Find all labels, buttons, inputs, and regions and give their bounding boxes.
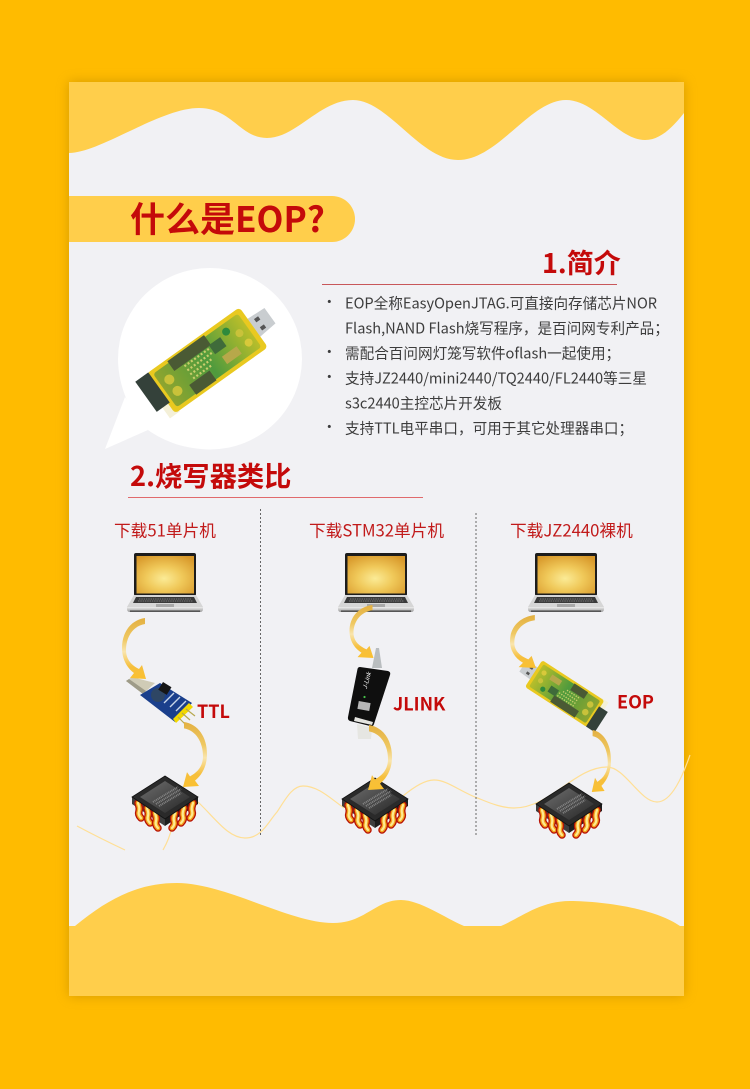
- heading: 2 comparison: 2.烧写器类比: [130, 454, 291, 494]
- icon: chip 1: [132, 776, 198, 828]
- text block: intro bullets: 支持TTL电平串口，可用于其它处理器串口；: [345, 418, 633, 438]
- label: JZ2440: 下载JZ2440裸机: [510, 518, 633, 542]
- label: 51: 下载51单片机: [114, 518, 216, 542]
- title: 什么是EOP?: [130, 192, 325, 243]
- icon: JLINK probe: [348, 648, 390, 739]
- text block: intro bullets: •: [322, 291, 337, 312]
- panel: main sheet: [69, 82, 684, 996]
- text block: intro bullets: [322, 291, 669, 438]
- text block: intro bullets: EOP全称EasyOpenJTAG.可直接向存储芯片NOR: [345, 292, 657, 314]
- icon: laptop 3: [528, 553, 604, 612]
- tag: TTL: TTL: [197, 698, 230, 724]
- text block: intro bullets: •: [322, 341, 337, 362]
- column dividers: [260, 509, 476, 835]
- icon: JLINK probe: J-Link: [360, 670, 373, 690]
- text block: intro bullets: 需配合百问网灯笼写软件oflash一起使用；: [345, 342, 620, 364]
- arrow: laptop to TTL: [122, 618, 146, 679]
- icon: EOP device: [514, 653, 612, 732]
- arrow: JLINK to chip: [368, 725, 392, 790]
- column: JZ2440: [510, 518, 654, 835]
- column: STM32: [309, 518, 446, 830]
- title pill: [69, 192, 355, 243]
- icon: chip 2: [342, 778, 408, 830]
- icon: EOP programmer: [135, 296, 285, 422]
- arrow: TTL to chip: [183, 722, 207, 787]
- tag: EOP: EOP: [617, 688, 654, 714]
- icon: laptop 1: [127, 553, 203, 612]
- label: STM32: 下载STM32单片机: [309, 518, 444, 542]
- text block: intro bullets: •: [322, 416, 337, 437]
- bottom wave: [69, 883, 684, 996]
- arrow: EOP to chip: [592, 730, 611, 792]
- icon: laptop 2: [338, 553, 414, 612]
- text block: intro bullets: s3c2440主控芯片开发板: [345, 392, 502, 414]
- thin decorative curve: [77, 755, 690, 850]
- top wave: [69, 82, 684, 160]
- speech bubble with EOP device: [105, 268, 302, 450]
- icon: chip 3: [536, 783, 602, 835]
- arrow: laptop to JLINK: [350, 605, 374, 658]
- icon: TTL module: [126, 677, 195, 725]
- arrow: laptop to EOP: [510, 615, 536, 668]
- heading: 1 intro: 1.简介: [542, 242, 621, 281]
- text block: intro bullets: 支持JZ2440/mini2440/TQ2440/FL2440等三星: [345, 368, 647, 388]
- tag: JLINK: JLINK: [393, 690, 446, 716]
- text block: intro bullets: Flash,NAND Flash烧写程序，是百问网专利产品；: [345, 318, 669, 338]
- column: 51 MCU: [114, 518, 230, 828]
- text block: intro bullets: •: [322, 366, 337, 387]
